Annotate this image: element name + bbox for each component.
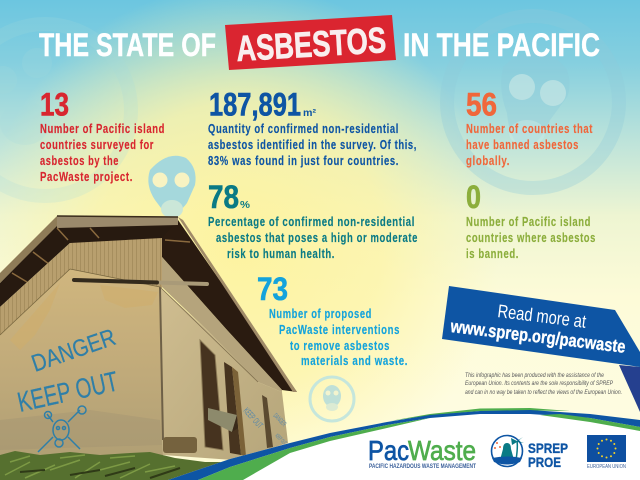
photo: derelict house: KEEP OUT [15, 366, 121, 418]
stat: 78 percent: Percentage of confirmed non-residential [208, 215, 415, 229]
stat: 13 countries surveyed: asbestos by the [40, 154, 119, 168]
stat: 13 countries surveyed: countries surveyed for [40, 138, 154, 152]
stat: 56 countries banned: Number of countries that [466, 122, 593, 136]
graffiti: DANGER [28, 324, 119, 378]
logo: PacWaste: Waste [408, 435, 476, 466]
window 2 [224, 362, 241, 455]
graffiti skull [38, 406, 86, 452]
photo: derelict house [0, 216, 297, 480]
stat: 13 countries surveyed: PacWaste project. [40, 170, 133, 184]
stat: 13 countries surveyed [40, 86, 165, 184]
stat: 187,891 square metres [208, 86, 417, 168]
stat: 78 percent [208, 179, 418, 261]
wall stains [10, 283, 158, 350]
watermark: large gas mask top right [447, 16, 619, 188]
photo: derelict house: DANGER [272, 412, 287, 428]
logo: PacWaste: Pac [368, 435, 409, 466]
footer swoosh [168, 408, 640, 480]
rafters [12, 228, 190, 282]
stat: 56 countries banned: 56 [466, 86, 497, 122]
stat: 73 interventions: 73 [257, 271, 288, 307]
stat: 78 percent: asbestos that poses a high or moderate [216, 231, 418, 245]
stat: 187,891 square metres: Quantity of confirmed non-residential [208, 122, 399, 136]
disclaimer text: This infographic has been produced with the assistance of the [465, 372, 604, 379]
stat: 56 countries banned: have banned asbestos [466, 138, 579, 152]
stat: 13 countries surveyed: 13 [40, 86, 69, 122]
stat: 73 interventions: materials and waste. [301, 354, 408, 368]
watermark: small gas mask near bottom [310, 377, 354, 421]
logo: SPREP PROE: SPREP [528, 440, 568, 456]
stat: 187,891 square metres: m² [303, 108, 317, 119]
stat: 187,891 square metres: asbestos identified in the survey. Of this, [208, 138, 417, 152]
dark roof underside, right [162, 220, 297, 392]
window 3 [262, 395, 273, 448]
callout banner: read more: Read more at [497, 300, 587, 332]
stat: 73 interventions: Number of proposed [269, 307, 372, 321]
logo: European Union flag [587, 435, 626, 470]
stat: 0 Pacific countries banned: countries where asbestos [466, 231, 596, 245]
stat: 0 Pacific countries banned: is banned. [466, 247, 519, 261]
watermark: faint gas mask top left [0, 24, 131, 196]
stat: 73 interventions: to remove asbestos [290, 339, 390, 353]
stat: 0 Pacific countries banned [466, 179, 596, 261]
right rake [178, 217, 297, 392]
left wall [0, 269, 163, 458]
corner edge [160, 287, 163, 440]
window 1 [200, 340, 223, 450]
stat: 56 countries banned: globally. [466, 154, 510, 168]
disclaimer text [465, 372, 622, 396]
stat: 0 Pacific countries banned: 0 [466, 179, 481, 215]
stat: 73 interventions [257, 271, 408, 368]
right upper wall strip [162, 257, 282, 392]
logo: PacWaste: PACIFIC HAZARDOUS WASTE MANAGEMENT [369, 463, 476, 470]
rust patch at wall base [163, 437, 197, 453]
right wall [160, 287, 288, 460]
corrugated gable [0, 238, 162, 335]
stat: 73 interventions: PacWaste interventions [279, 323, 400, 337]
title: THE STATE OF [39, 27, 216, 63]
stat: 56 countries banned [466, 86, 593, 168]
logo: European Union flag: EUROPEAN UNION [587, 464, 626, 470]
dark roof underside, left [0, 225, 178, 307]
logo: SPREP PROE [492, 436, 568, 470]
logo: PacWaste [368, 435, 476, 470]
left rake [0, 216, 57, 283]
watermark: small gas mask above roof [148, 156, 196, 218]
rusty pipe [74, 280, 207, 284]
title badge: asbestos stamp: ASBESTOS [235, 19, 387, 69]
stat: 0 Pacific countries banned: Number of Pacific island [466, 215, 591, 229]
photo: derelict house: KEEP OUT [242, 406, 265, 430]
logo: SPREP PROE: PROE [528, 454, 561, 470]
stat: 187,891 square metres: 83% was found in just four countries. [208, 154, 399, 168]
stat: 78 percent: 78 [208, 179, 239, 215]
title [39, 27, 600, 63]
stat: 78 percent: % [240, 200, 250, 211]
grass [0, 451, 230, 480]
title: IN THE PACIFIC [403, 27, 600, 63]
callout banner: read more [442, 286, 640, 412]
stat: 187,891 square metres: 187,891 [209, 86, 301, 122]
stat: 78 percent: risk to human health. [227, 247, 335, 261]
stat: 13 countries surveyed: Number of Pacific island [40, 122, 165, 136]
roof fascia [57, 216, 178, 228]
protruding pipe [208, 408, 237, 432]
photo: derelict house: KEEP OUT [274, 433, 287, 447]
